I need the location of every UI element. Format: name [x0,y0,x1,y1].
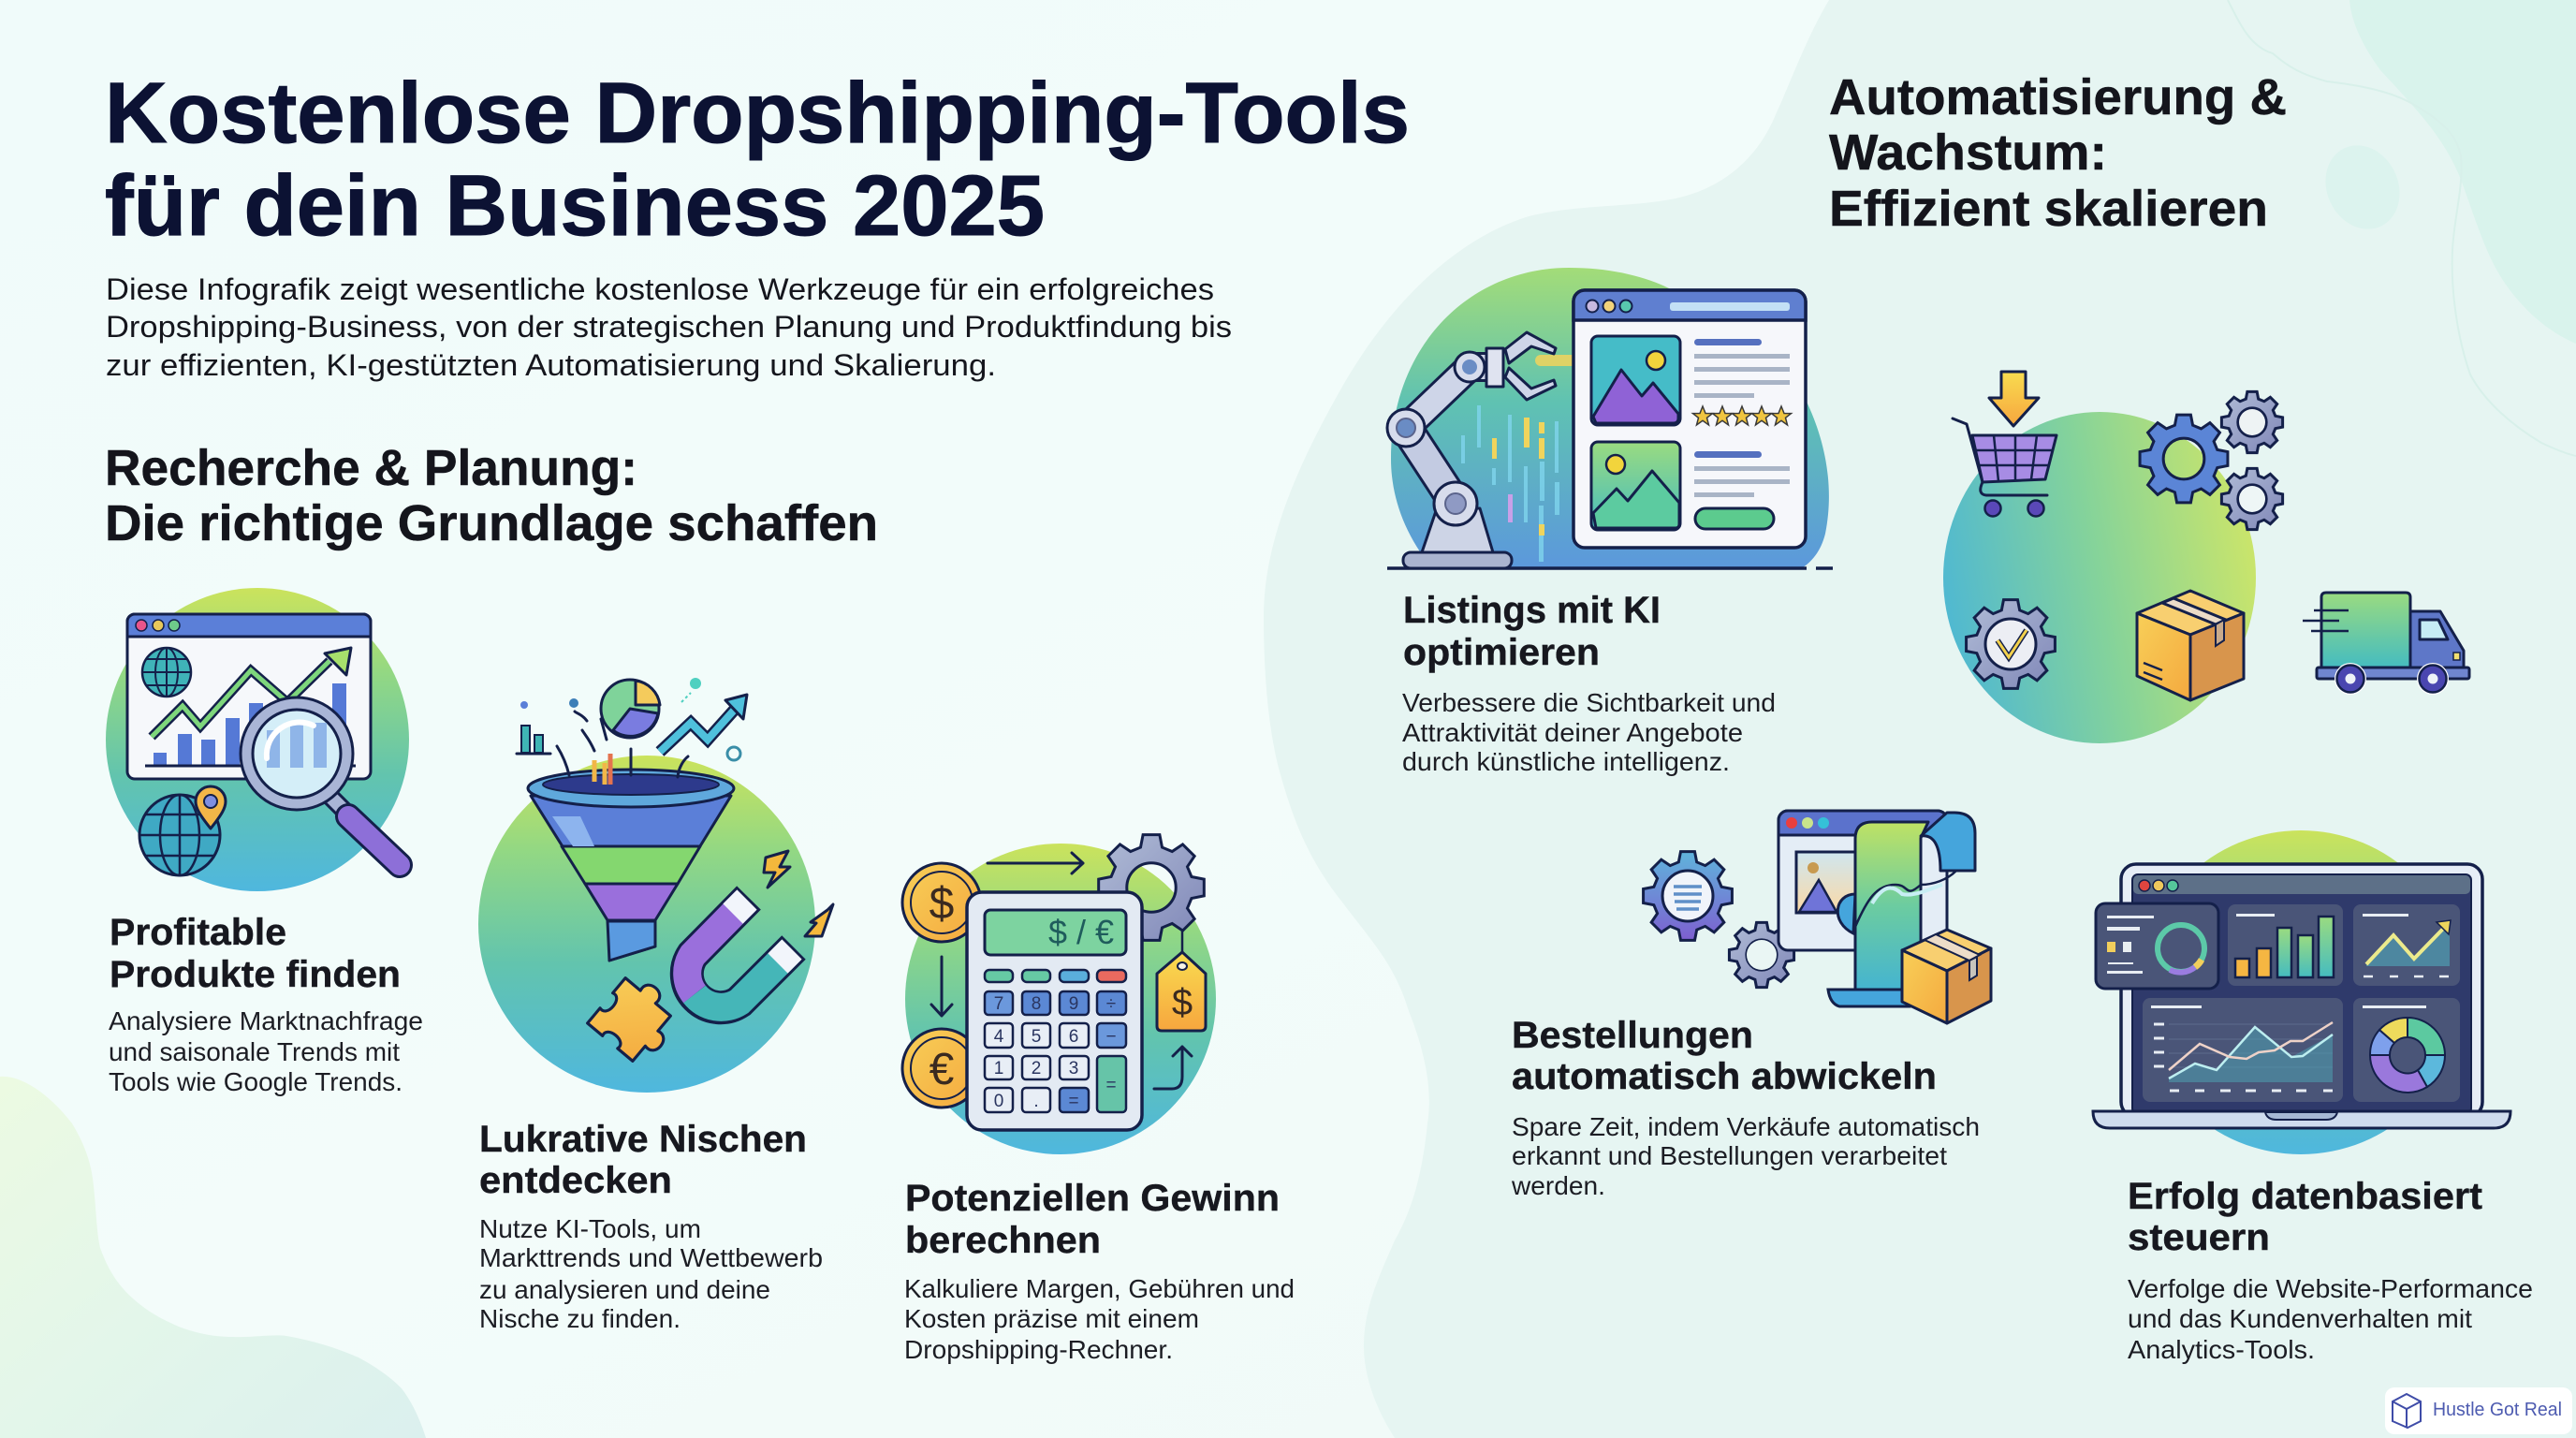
description [1511,1112,1980,1200]
heading: Bestellungen [1512,1015,1753,1056]
description [2128,1274,2533,1364]
intro text: Dropshipping-Business, von der strategischen Planung und Produktfindung bis [106,310,1232,344]
heading: Erfolg datenbasiert [2128,1176,2482,1217]
panel: Automatisierung illustration [1943,372,2469,743]
description: durch künstliche intelligenz. [1402,747,1730,776]
heading: steuern [2128,1217,2270,1258]
description: und saisonale Trends mit [109,1037,400,1066]
icon: parcel box [2137,591,2244,700]
description: Markttrends und Wettbewerb [479,1243,823,1272]
icon: calculator with coins, gear, price tag: = [1105,1076,1117,1095]
intro text: zur effizienten, KI-gestützten Automatisierung und Skalierung. [106,348,996,382]
icon: gradient oval [1943,412,2256,743]
icon: calculator with coins, gear, price tag: 0 [994,1092,1003,1111]
icon: calculator with coins, gear, price tag: 7 [994,994,1003,1014]
icon: calculator with coins, gear, price tag [902,835,1216,1154]
icon: gears [2140,391,2283,530]
description [109,1006,423,1096]
title: Kostenlose Dropshipping-Tools [105,66,1410,161]
heading: Listings mit KI [1403,590,1661,631]
badge: Hustle Got Real [2385,1387,2572,1434]
icon: calculator with coins, gear, price tag: − [1105,1027,1117,1047]
title: für dein Business 2025 [105,158,1045,254]
section heading: Automatisierung & Wachstum [1829,69,2287,237]
description: Verfolge die Website-Performance [2128,1274,2533,1303]
title [105,66,1410,254]
icon: calculator with coins, gear, price tag: . [1033,1092,1039,1111]
description [1402,688,1776,776]
badge text: Hustle Got Real [2433,1400,2562,1420]
heading: optimieren [1403,632,1600,673]
icon: calculator with coins, gear, price tag: $ / € [1048,913,1114,951]
icon: calculator with coins, gear, price tag: € [929,1045,955,1094]
description: Nische zu finden. [479,1304,681,1333]
description: Analytics-Tools. [2128,1335,2315,1364]
section heading: Recherche & Planung [105,440,878,551]
icon: browser chart with magnifier and globe [106,588,409,891]
panel: Profitable Produkte finden [106,588,423,1096]
icon: calculator with coins, gear, price tag: ÷ [1106,994,1116,1014]
description: Analysiere Marktnachfrage [109,1006,423,1035]
description: Verbessere die Sichtbarkeit und [1402,688,1776,717]
icon: delivery truck [2303,593,2469,695]
heading: Lukrative Nischen [479,1119,807,1160]
panel: Lukrative Nischen entdecken [478,678,833,1333]
section heading: Recherche & Planung: Recherche & Planung: [105,440,637,496]
heading [2128,1176,2482,1258]
description [479,1214,823,1333]
heading: automatisch abwickeln [1512,1056,1937,1097]
description: zu analysieren und deine [479,1275,770,1304]
section heading: Automatisierung & Wachstum: Effizient skalieren [1829,181,2268,237]
icon: shopping cart with arrow [1953,372,2056,517]
heading: Profitable [110,912,286,953]
icon: robot arm and product listing [1387,268,1833,568]
icon: calculator with coins, gear, price tag: 4 [994,1027,1004,1047]
heading: berechnen [905,1220,1101,1261]
heading: Potenziellen Gewinn [905,1178,1280,1219]
icon: cube logo [2393,1394,2421,1428]
icon: calculator with coins, gear, price tag: 3 [1069,1059,1078,1078]
panel: Bestellungen automatisch abwickeln [1511,811,1991,1200]
description: Nutze KI-Tools, um [479,1214,701,1243]
icon: calculator with coins, gear, price tag: $ [929,879,954,929]
panel: Erfolg datenbasiert steuern [2093,830,2533,1364]
section heading: Recherche & Planung: Die richtige Grundlage schaffen [105,495,878,551]
heading [479,1119,807,1201]
icon: calculator with coins, gear, price tag: 5 [1032,1027,1041,1047]
description [904,1274,1295,1364]
icon: calculator with coins, gear, price tag: = [1068,1092,1079,1111]
heading [110,912,401,995]
intro text: Diese Infografik zeigt wesentliche kostenlose Werkzeuge für ein erfolgreiches [106,272,1214,306]
heading [905,1178,1280,1261]
panel: Potenziellen Gewinn berechnen [902,835,1295,1364]
description: werden. [1511,1171,1605,1200]
description: Tools wie Google Trends. [109,1067,402,1096]
icon: gear with check [1967,600,2055,688]
description: Kosten präzise mit einem [904,1304,1199,1333]
icon: calculator with coins, gear, price tag: 2 [1032,1059,1041,1078]
panel: Listings mit KI optimieren [1387,268,1833,776]
description: Spare Zeit, indem Verkäufe automatisch [1512,1112,1980,1141]
section heading: Automatisierung & Wachstum: Wachstum: [1829,125,2107,181]
icon: calculator with coins, gear, price tag: 1 [994,1059,1003,1078]
icon: laptop analytics dashboard [2093,830,2510,1154]
heading [1403,590,1661,673]
icon: calculator with coins, gear, price tag: 8 [1032,994,1041,1014]
description: Attraktivität deiner Angebote [1402,718,1743,747]
description: Kalkuliere Margen, Gebühren und [904,1274,1295,1303]
icon: calculator with coins, gear, price tag: 9 [1069,994,1078,1014]
section heading: Automatisierung & Wachstum: Automatisierung & [1829,69,2287,125]
icon: order automation [1644,811,1991,1023]
heading: Produkte finden [110,954,401,995]
description: erkannt und Bestellungen verarbeitet [1512,1141,1947,1170]
description: Dropshipping-Rechner. [904,1335,1173,1364]
heading: entdecken [479,1160,672,1201]
description: und das Kundenverhalten mit [2128,1304,2472,1333]
icon: calculator with coins, gear, price tag: 6 [1069,1027,1078,1047]
heading [1512,1015,1937,1097]
icon: funnel, magnet, puzzle [478,678,833,1093]
intro text [106,272,1232,382]
icon: calculator with coins, gear, price tag: $ [1172,982,1193,1023]
